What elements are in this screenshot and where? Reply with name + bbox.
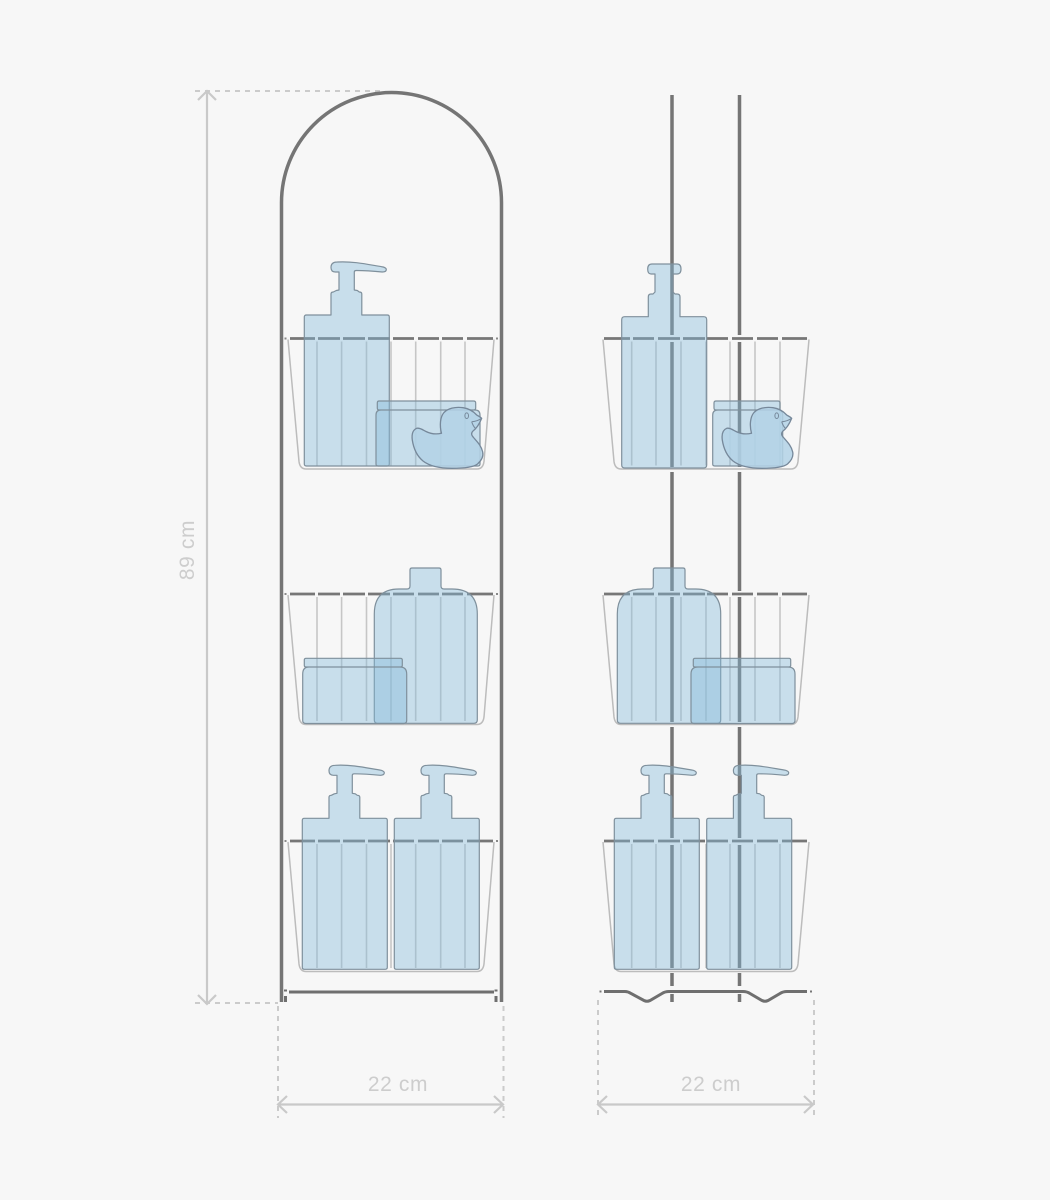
pump bottle, top shelf — [304, 262, 389, 466]
pump bottle side, top shelf — [622, 264, 707, 468]
jar, middle shelf — [691, 658, 795, 724]
middle basket — [603, 594, 809, 724]
base bar — [286, 990, 496, 1002]
pump bottle left, bottom shelf — [302, 765, 387, 969]
arched frame — [282, 93, 502, 1002]
width dimension, front view: 22 cm — [278, 1006, 504, 1118]
pump bottle right, bottom shelf — [394, 765, 479, 969]
top basket — [603, 338, 809, 469]
wavy base — [604, 992, 807, 1001]
width dimension, side view: 22 cm: 22 cm — [681, 1073, 741, 1096]
top basket — [284, 338, 498, 469]
base end dots — [600, 990, 812, 992]
front view shelf — [282, 93, 502, 1002]
jar, middle shelf — [303, 658, 407, 724]
bottom basket — [284, 841, 498, 972]
bottom basket — [603, 841, 809, 972]
middle basket — [284, 594, 498, 724]
round bottle, middle shelf — [374, 568, 477, 723]
height dimension: 89 cm: 89 cm — [176, 520, 199, 580]
width dimension, side view: 22 cm — [598, 1000, 814, 1118]
rubber duck, top shelf — [412, 407, 483, 468]
round bottle, middle shelf — [617, 568, 721, 723]
pump bottle right, bottom shelf — [707, 765, 792, 969]
rubber duck, top shelf — [722, 407, 793, 468]
jar, top shelf — [376, 401, 480, 466]
height dimension: 89 cm — [176, 91, 385, 1004]
side view shelf — [600, 95, 812, 1002]
width dimension, front view: 22 cm: 22 cm — [368, 1073, 428, 1096]
vertical posts — [672, 95, 740, 1002]
jar, top shelf — [713, 401, 783, 466]
pump bottle left, bottom shelf — [614, 765, 699, 969]
